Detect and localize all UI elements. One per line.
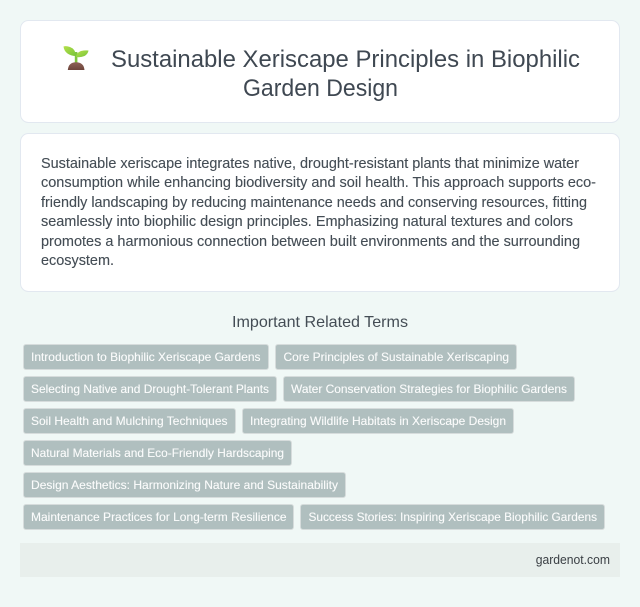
title: Garden Design (243, 75, 398, 102)
footer (20, 543, 620, 577)
chip: water conservation (284, 376, 574, 402)
chip: introduction (24, 344, 268, 370)
text block: description paragraph: Sustainable xeriscape integrates native, drought-resistant plants that minimize water (41, 156, 579, 172)
chip: wildlife habitats (242, 408, 514, 434)
chip: water conservation: Water Conservation Strategies for Biophilic Gardens (291, 382, 567, 396)
title: Sustainable Xeriscape Principles in Biophilic (111, 46, 580, 73)
text block: description paragraph (41, 156, 596, 269)
chip: success stories: Success Stories: Inspiring Xeriscape Biophilic Gardens (308, 510, 597, 524)
panel: related term chips (24, 344, 604, 530)
chip: wildlife habitats: Integrating Wildlife Habitats in Xeriscape Design (250, 414, 506, 428)
chip: natural materials: Natural Materials and Eco-Friendly Hardscaping (31, 446, 284, 460)
text block: description paragraph: friendly landscaping by reducing maintenance needs and conserving resources, fitting (41, 195, 587, 211)
chip: maintenance (24, 504, 294, 530)
chip: native plants (24, 376, 276, 402)
chip: design aesthetics (24, 472, 346, 498)
chip: success stories (300, 504, 604, 530)
chip: soil health (24, 408, 236, 434)
chip: natural materials (24, 440, 292, 466)
heading: related terms: Important Related Terms (232, 314, 408, 331)
chip: design aesthetics: Design Aesthetics: Harmonizing Nature and Sustainability (31, 478, 338, 492)
chip: maintenance: Maintenance Practices for Long-term Resilience (31, 510, 287, 524)
chip: introduction: Introduction to Biophilic Xeriscape Gardens (31, 350, 260, 364)
panel: description (20, 134, 620, 292)
text block: description paragraph: promotes a harmonious connection between built environments and the surrounding (41, 234, 580, 250)
chip: soil health: Soil Health and Mulching Techniques (31, 414, 228, 428)
text block: description paragraph: seamlessly into biophilic design principles. Emphasizing natural textures and colors (41, 214, 573, 230)
panel: header card (20, 20, 620, 122)
chip: native plants: Selecting Native and Drought-Tolerant Plants (31, 382, 269, 396)
icon: seedling (64, 46, 88, 70)
title (111, 46, 580, 102)
text block: description paragraph: ecosystem. (41, 253, 114, 269)
text block: description paragraph: consumption while enhancing biodiversity and soil health. This approach supports eco- (41, 175, 596, 191)
footer source text: gardenot.com (536, 552, 610, 567)
chip: core principles: Core Principles of Sustainable Xeriscaping (284, 350, 509, 364)
chip: core principles (276, 344, 516, 370)
